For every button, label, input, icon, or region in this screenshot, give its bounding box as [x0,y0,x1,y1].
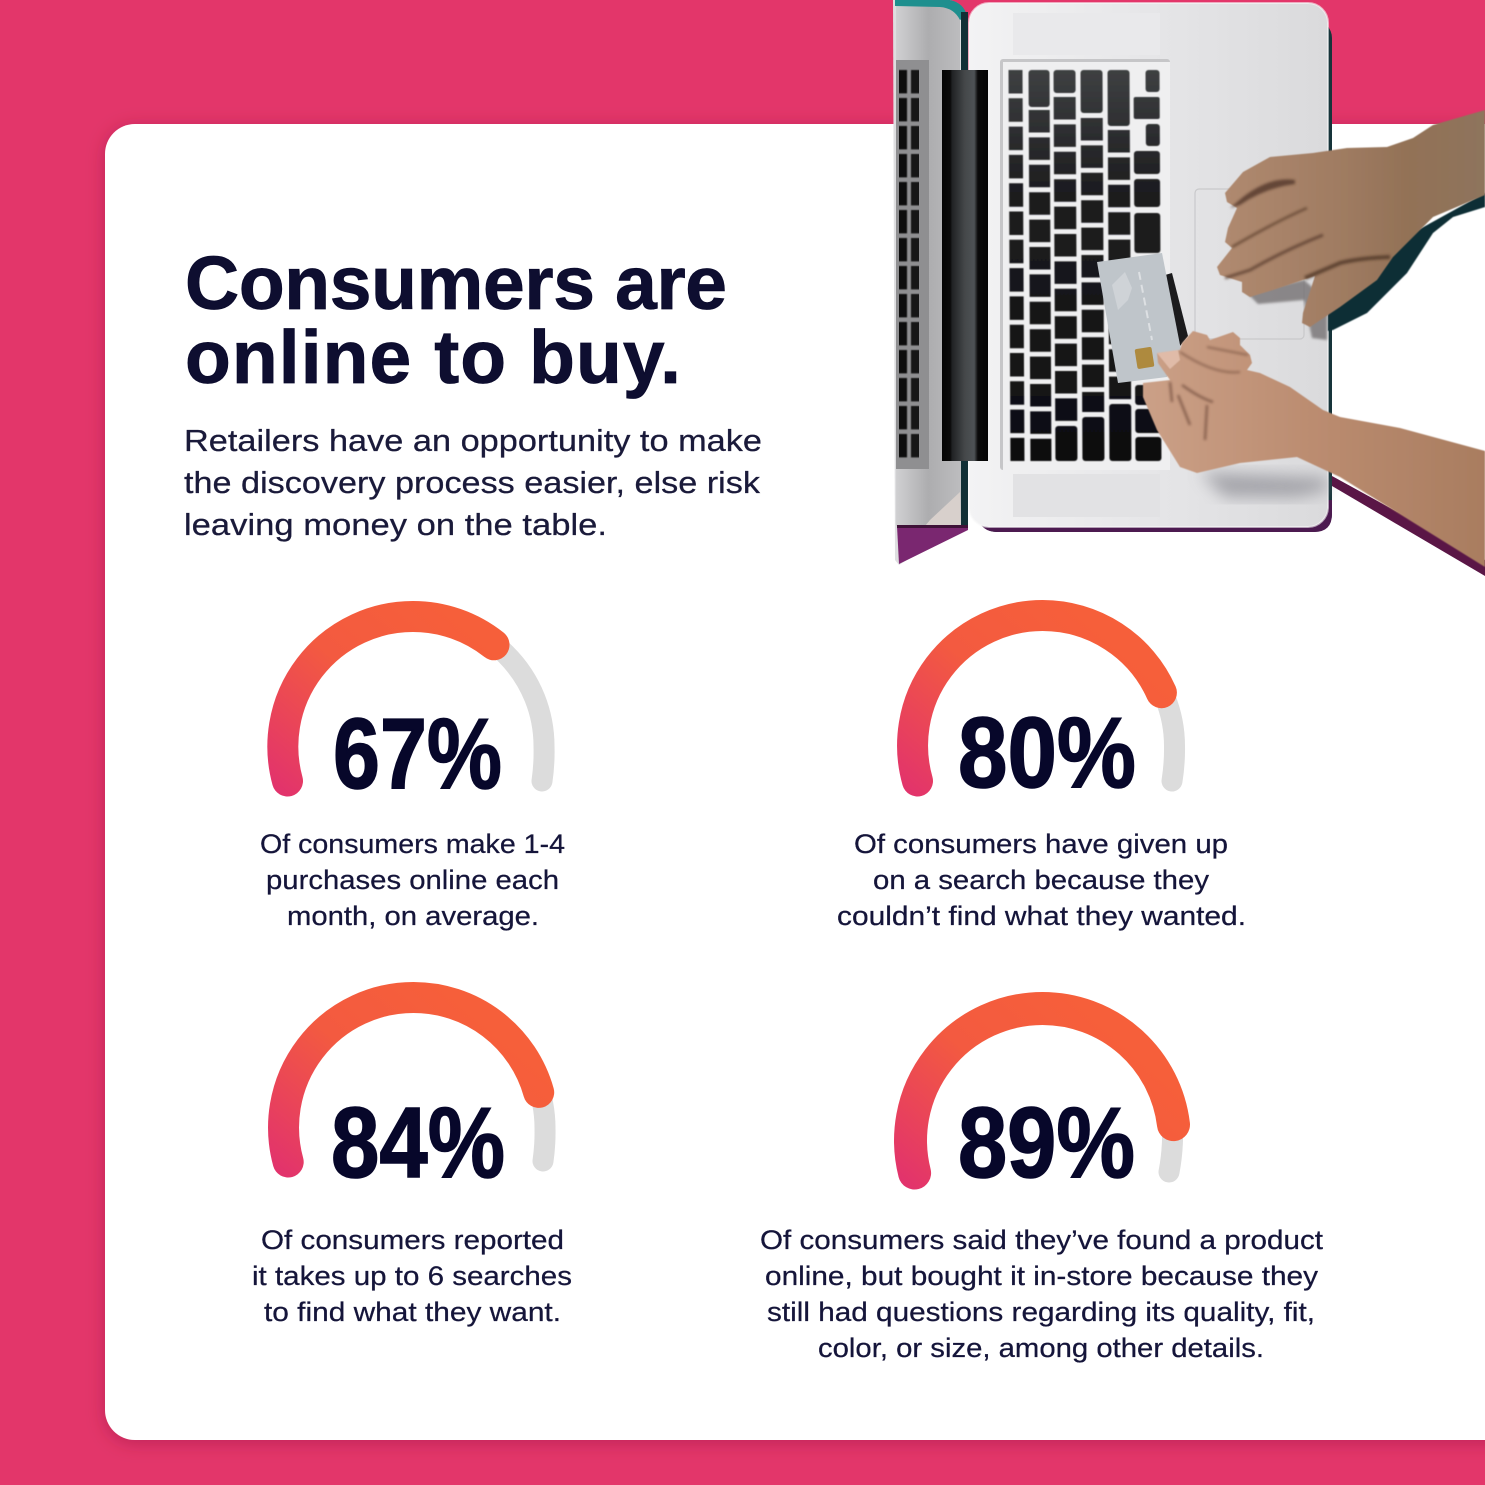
upper hand [1217,110,1485,327]
upper hand shadow on laptop [1246,280,1327,340]
gauge track [413,616,544,781]
palm creases and finger gaps [1170,347,1248,440]
stat text 67% [260,829,565,931]
stat text 80%: Of consumers have given up [854,829,1228,859]
stat text 80%: on a search because they [873,865,1210,895]
gauge track [1042,1008,1172,1172]
stat text 89% [760,1225,1324,1363]
gauge 89% [911,1008,1174,1199]
laptop lid [893,0,968,565]
stat text 80%: couldn’t find what they wanted. [837,901,1246,931]
laptop base [969,3,1332,532]
heading: online to buy. [185,315,681,399]
intro text block [184,423,762,542]
percentage: 67% [333,698,502,810]
stat text 89%: online, but bought it in-store because they [765,1261,1319,1291]
gauge value arc [284,998,539,1162]
gauge 67% [283,616,544,810]
keyboard keys [1016,70,1161,461]
gauge track [414,998,545,1161]
trackpad [1195,189,1304,339]
stat text 84%: Of consumers reported [261,1225,564,1255]
stat text 84%: to find what they want. [264,1297,561,1327]
gauge 84% [284,998,545,1199]
stat text 84%: it takes up to 6 searches [252,1261,572,1291]
stat text 89%: color, or size, among other details. [818,1333,1264,1363]
photo: laptop with hands and credit card [893,0,1485,576]
stat text 89%: Of consumers said they’ve found a product [760,1225,1324,1255]
thumbnail [1157,350,1180,369]
percentage: 84% [331,1087,505,1199]
percentage: 80% [958,697,1136,809]
teal shadow of upper hand [1328,193,1485,331]
stat text 89%: still had questions regarding its quality, fit, [767,1297,1315,1327]
lower hand and arm [1143,331,1485,567]
stat text 84% [252,1225,572,1327]
percentage: 89% [958,1087,1135,1199]
gauge value arc [913,615,1161,781]
gauge value arc [283,616,494,781]
intro text block: the discovery process easier, else risk [184,465,761,500]
stat text 67%: month, on average. [287,901,539,931]
stat text 80% [837,829,1246,931]
gauge value arc [911,1008,1174,1173]
finger creases [1225,179,1390,278]
gauge 80% [913,615,1175,809]
lower hand shadow on laptop [1200,472,1327,497]
stat text 67%: purchases online each [266,865,559,895]
intro text block: leaving money on the table. [184,507,607,542]
credit card [1097,253,1188,383]
gauge track [1043,616,1175,781]
heading: Consumers are [185,241,727,325]
intro text block: Retailers have an opportunity to make [184,423,762,458]
purple arm shadow [1332,476,1485,576]
heading [185,241,727,399]
hinge [942,70,988,461]
stat text 67%: Of consumers make 1-4 [260,829,565,859]
